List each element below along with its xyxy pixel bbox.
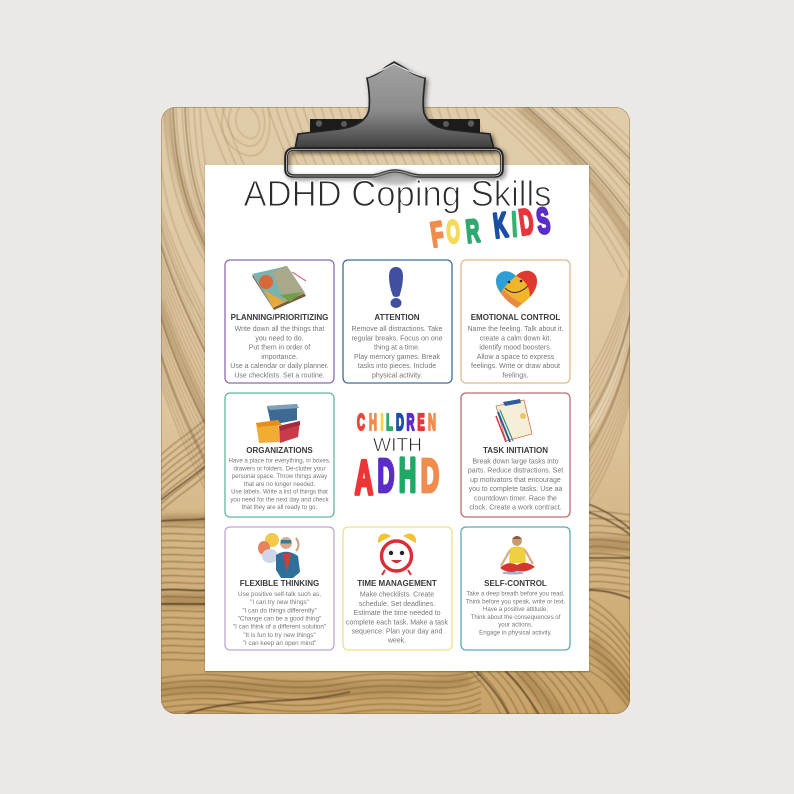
body text: "I can do things differently" — [242, 607, 317, 614]
body text — [351, 326, 443, 379]
icon: clipboard with pencils — [496, 399, 532, 442]
children lettering: C — [357, 410, 365, 435]
clip highlight edge — [367, 64, 425, 77]
body text: Engage in physical activity. — [479, 630, 552, 636]
adhd lettering: D — [421, 449, 439, 501]
body text: Have a place for everything, in boxes, — [229, 458, 331, 464]
children lettering — [357, 410, 436, 435]
icon: superhero with balloons — [258, 533, 300, 578]
body text — [468, 326, 564, 379]
body text: countdown timer. Race the — [474, 495, 557, 502]
body text — [233, 591, 326, 647]
heading: ATTENTION — [374, 313, 420, 322]
panel: time management — [343, 527, 452, 650]
body text: up motivators that encourage — [470, 477, 561, 484]
body text — [466, 590, 566, 636]
body text: clock. Create a work contract. — [469, 505, 562, 512]
body text: create a calm down kit. — [480, 335, 551, 342]
heading: TASK INITIATION — [483, 446, 548, 455]
body text: Use checklists. Set a routine. — [234, 372, 325, 379]
body text: "It is fun to try new things" — [243, 632, 316, 639]
panel: self-control — [461, 527, 570, 650]
clipboard wood board — [161, 70, 630, 714]
for kids lettering: O — [445, 215, 461, 250]
clip back plate with rivets — [310, 119, 480, 133]
children lettering: I — [380, 410, 384, 435]
heading: EMOTIONAL CONTROL — [471, 313, 560, 322]
heading: FLEXIBLE THINKING — [240, 579, 319, 588]
for kids lettering: S — [534, 201, 553, 243]
children lettering: D — [396, 410, 404, 435]
icon: picture book — [252, 266, 306, 310]
body text: Play memory games. Break — [354, 354, 440, 361]
body text: Break down large tasks into — [472, 458, 559, 465]
body text: Put them in order of — [249, 344, 310, 352]
adhd lettering — [355, 449, 439, 505]
body text: drawers or folders. De-clutter your — [233, 465, 326, 472]
body text: "I can think of a different solution" — [233, 624, 326, 631]
body text: that are no longer needed. — [244, 481, 316, 488]
center badge: children with adhd — [355, 410, 439, 505]
body text: physical activity. — [372, 372, 422, 379]
body text — [468, 458, 563, 512]
body text: "I can keep an open mind" — [243, 640, 316, 647]
body text: Estimate the time needed to — [353, 610, 441, 617]
body text: Use a calendar or daily planner. — [230, 363, 329, 370]
body text: Allow a space to express — [477, 354, 555, 361]
adhd lettering: H — [399, 450, 416, 503]
panel: planning/prioritizing — [225, 260, 334, 383]
adhd lettering: D — [378, 450, 394, 502]
icon: exclamation mark — [389, 267, 403, 308]
body text: that they are all ready to go. — [242, 504, 318, 511]
heading: SELF-CONTROL — [484, 579, 547, 588]
with: WITH — [373, 435, 422, 455]
children lettering: H — [369, 410, 377, 435]
body text: Remove all distractions. Take — [352, 326, 443, 333]
body text: feelings. Write or draw about — [471, 363, 560, 370]
icon: alarm clock — [378, 534, 416, 575]
body text — [230, 326, 329, 379]
body text: tasks into pieces. Include — [358, 363, 436, 370]
body text: "Change can be a good thing" — [238, 616, 321, 622]
body text: thing at a time. — [374, 344, 420, 352]
children lettering: L — [386, 410, 393, 435]
children lettering: E — [417, 410, 425, 435]
body text: complete each task. Make a task — [346, 619, 448, 626]
heading: PLANNING/PRIORITIZING — [231, 313, 328, 322]
heading: TIME MANAGEMENT — [357, 579, 437, 588]
body text: Take a deep breath before you read. — [466, 590, 565, 598]
body text: Think about the consequences of — [471, 614, 561, 621]
body text: Use labels. Write a list of things that — [231, 488, 328, 496]
for kids lettering: K — [491, 205, 510, 245]
children lettering: R — [407, 410, 414, 435]
clip wire loop — [286, 149, 502, 176]
body text — [229, 458, 331, 511]
body text: week. — [387, 638, 406, 645]
body text: schedule. Set deadlines. — [359, 601, 435, 608]
body text: you need for the next day and check — [230, 496, 330, 503]
for kids lettering: F — [428, 215, 446, 255]
icon: smiling rainbow heart — [496, 271, 537, 308]
body text: importance. — [261, 354, 298, 361]
body text: parts. Reduce distractions. Set — [468, 468, 563, 475]
body text: personal space. Throw things away — [232, 473, 328, 480]
body text: Name the feeling. Talk about it. — [468, 326, 564, 333]
clip body — [295, 62, 494, 149]
adhd lettering: A — [355, 452, 373, 505]
for kids lettering: I — [511, 205, 518, 244]
body text: identify mood boosters. — [479, 344, 552, 352]
panel: task initiation — [461, 393, 570, 517]
body text — [346, 592, 448, 645]
body text: feelings. — [502, 372, 529, 379]
body text: you need to do. — [255, 335, 304, 342]
body text: Have a positive attitude. — [483, 606, 548, 613]
icon: child meditating — [500, 536, 535, 574]
panel: emotional control — [461, 260, 570, 383]
body text: Think before you speak, write or text. — [466, 598, 566, 605]
body text: your actions. — [498, 622, 533, 629]
icon: stacked storage boxes — [256, 404, 300, 443]
body text: you to complete tasks. Use aa — [469, 486, 562, 493]
for kids lettering — [428, 201, 553, 255]
clip loop shadow on paper — [372, 171, 418, 185]
heading: ORGANIZATIONS — [246, 446, 313, 455]
panel: organizations — [225, 393, 334, 517]
body text: Use positive self-talk such as, — [238, 591, 321, 598]
children lettering: N — [428, 410, 436, 435]
paper sheet — [205, 165, 589, 671]
for kids lettering: R — [464, 212, 481, 250]
panel: attention — [343, 260, 452, 383]
panel: flexible thinking — [225, 527, 334, 650]
body text: sequence. Plan your day and — [352, 628, 442, 636]
for kids lettering: D — [517, 202, 536, 244]
body text: Make checklists. Create — [360, 592, 434, 599]
body text: "I can try new things" — [250, 599, 309, 606]
body text: Write down all the things that — [235, 326, 324, 333]
title: ADHD Coping Skills — [244, 173, 552, 214]
body text: regular breaks. Focus on one — [351, 335, 443, 342]
